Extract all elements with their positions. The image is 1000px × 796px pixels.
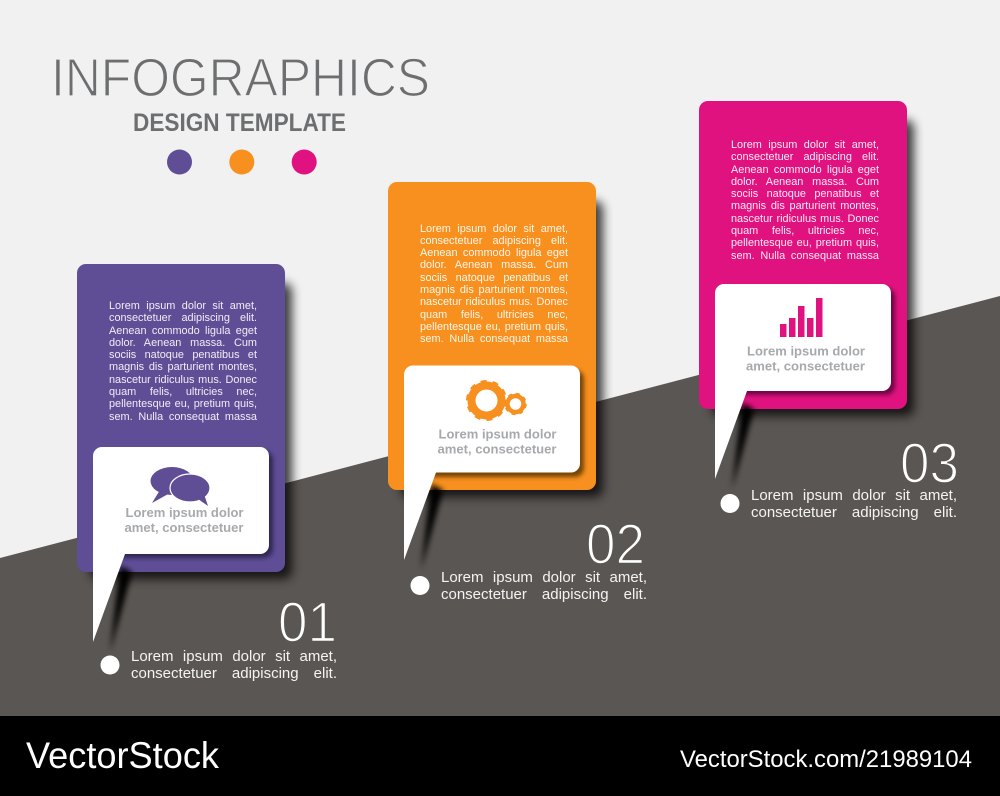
step 02 caption: Lorem ipsum dolor sit amet,	[441, 568, 647, 586]
footer url: VectorStock.com/21989104	[680, 746, 972, 773]
panel 02	[388, 182, 603, 570]
callout label: amet, consectetuer	[438, 442, 557, 456]
white box shadow	[408, 370, 584, 477]
body text: nascetur ridiculus mus. Donec	[420, 296, 568, 308]
body text: sociis natoque penatibus et	[109, 349, 257, 361]
tail shadow	[421, 484, 443, 570]
subtitle: DESIGN TEMPLATE	[133, 109, 346, 137]
tail shadow	[110, 566, 132, 652]
body text: consectetuer adipiscing elit.	[420, 235, 568, 247]
body text: Lorem ipsum dolor sit amet,	[109, 300, 257, 312]
body text: sem. Nulla consequat massa	[109, 411, 257, 423]
white callout	[93, 447, 269, 642]
callout label: amet, consectetuer	[746, 360, 865, 374]
body text: magnis dis parturient montes,	[109, 361, 257, 373]
body text: magnis dis parturient montes,	[420, 284, 568, 296]
body text: pellentesque eu, pretium quis,	[420, 321, 568, 333]
step 02 caption: 02	[586, 512, 645, 576]
body text: Lorem ipsum dolor sit amet,	[420, 222, 568, 234]
body text: pellentesque eu, pretium quis,	[109, 398, 257, 410]
body text: dolor. Aenean massa. Cum	[109, 337, 257, 349]
step 02 caption	[410, 512, 647, 604]
orange card	[388, 182, 596, 490]
body text	[731, 139, 879, 269]
body text: dolor. Aenean massa. Cum	[731, 176, 879, 188]
colour dots	[167, 150, 317, 174]
body text: Aenean commodo ligula eget	[420, 247, 568, 259]
callout label: Lorem ipsum dolor	[126, 506, 244, 520]
body text: quam felis, ultricies nec,	[731, 225, 879, 237]
step 03 caption	[720, 432, 959, 523]
panel shadow	[401, 201, 603, 497]
callout label: amet, consectetuer	[124, 521, 244, 535]
panel shadow	[712, 120, 914, 416]
body text: quam felis, ultricies nec,	[420, 309, 568, 321]
callout label	[124, 506, 244, 535]
callout label: Lorem ipsum dolor	[438, 428, 557, 442]
body text: nascetur ridiculus mus. Donec	[109, 374, 257, 386]
panel 01	[77, 264, 292, 652]
white callout	[404, 366, 580, 560]
body text: Aenean commodo ligula eget	[109, 325, 257, 337]
title: INFOGRAPHICS	[51, 48, 430, 108]
callout label: Lorem ipsum dolor	[747, 344, 865, 358]
step 02 caption: consectetuer adipiscing elit.	[441, 586, 647, 602]
body text: sem. Nulla consequat massa	[420, 333, 568, 345]
tail shadow	[732, 403, 754, 489]
step 03 caption: 03	[900, 432, 959, 496]
body text: consectetuer adipiscing elit.	[109, 312, 257, 324]
step 01 caption: 01	[278, 590, 337, 654]
purple card	[77, 264, 285, 572]
body text	[109, 300, 257, 430]
body text: sociis natoque penatibus et	[731, 188, 879, 200]
icon: gears	[468, 382, 525, 418]
body text: Aenean commodo ligula eget	[731, 164, 879, 176]
body text: consectetuer adipiscing elit.	[731, 151, 879, 163]
body text: sem. Nulla consequat massa	[731, 250, 879, 262]
body text: dolor. Aenean massa. Cum	[420, 259, 568, 271]
white callout	[715, 284, 891, 479]
callout label	[438, 428, 557, 456]
panel shadow	[90, 283, 292, 579]
dark diagonal band	[0, 296, 1000, 716]
body text: magnis dis parturient montes,	[731, 200, 879, 212]
step 01 caption: consectetuer adipiscing elit.	[131, 665, 337, 682]
white box shadow	[97, 451, 273, 558]
white box shadow	[719, 288, 895, 395]
callout label	[746, 344, 865, 374]
body text: quam felis, ultricies nec,	[109, 386, 257, 398]
step 01 caption: Lorem ipsum dolor sit amet,	[131, 648, 337, 665]
body text	[420, 222, 568, 352]
body text: nascetur ridiculus mus. Donec	[731, 213, 879, 225]
panel 03	[699, 101, 914, 489]
footer logo: VectorStock	[26, 735, 219, 776]
icon: bar chart	[780, 298, 822, 337]
step 03 caption: consectetuer adipiscing elit.	[751, 504, 957, 521]
footer bar	[0, 716, 1000, 796]
body text: sociis natoque penatibus et	[420, 272, 568, 284]
body text: Lorem ipsum dolor sit amet,	[731, 139, 879, 151]
body text: pellentesque eu, pretium quis,	[731, 237, 879, 249]
magenta card	[699, 101, 907, 409]
step 01 caption	[100, 590, 337, 684]
step 03 caption: Lorem ipsum dolor sit amet,	[751, 487, 957, 504]
icon: chat bubbles	[150, 467, 210, 506]
